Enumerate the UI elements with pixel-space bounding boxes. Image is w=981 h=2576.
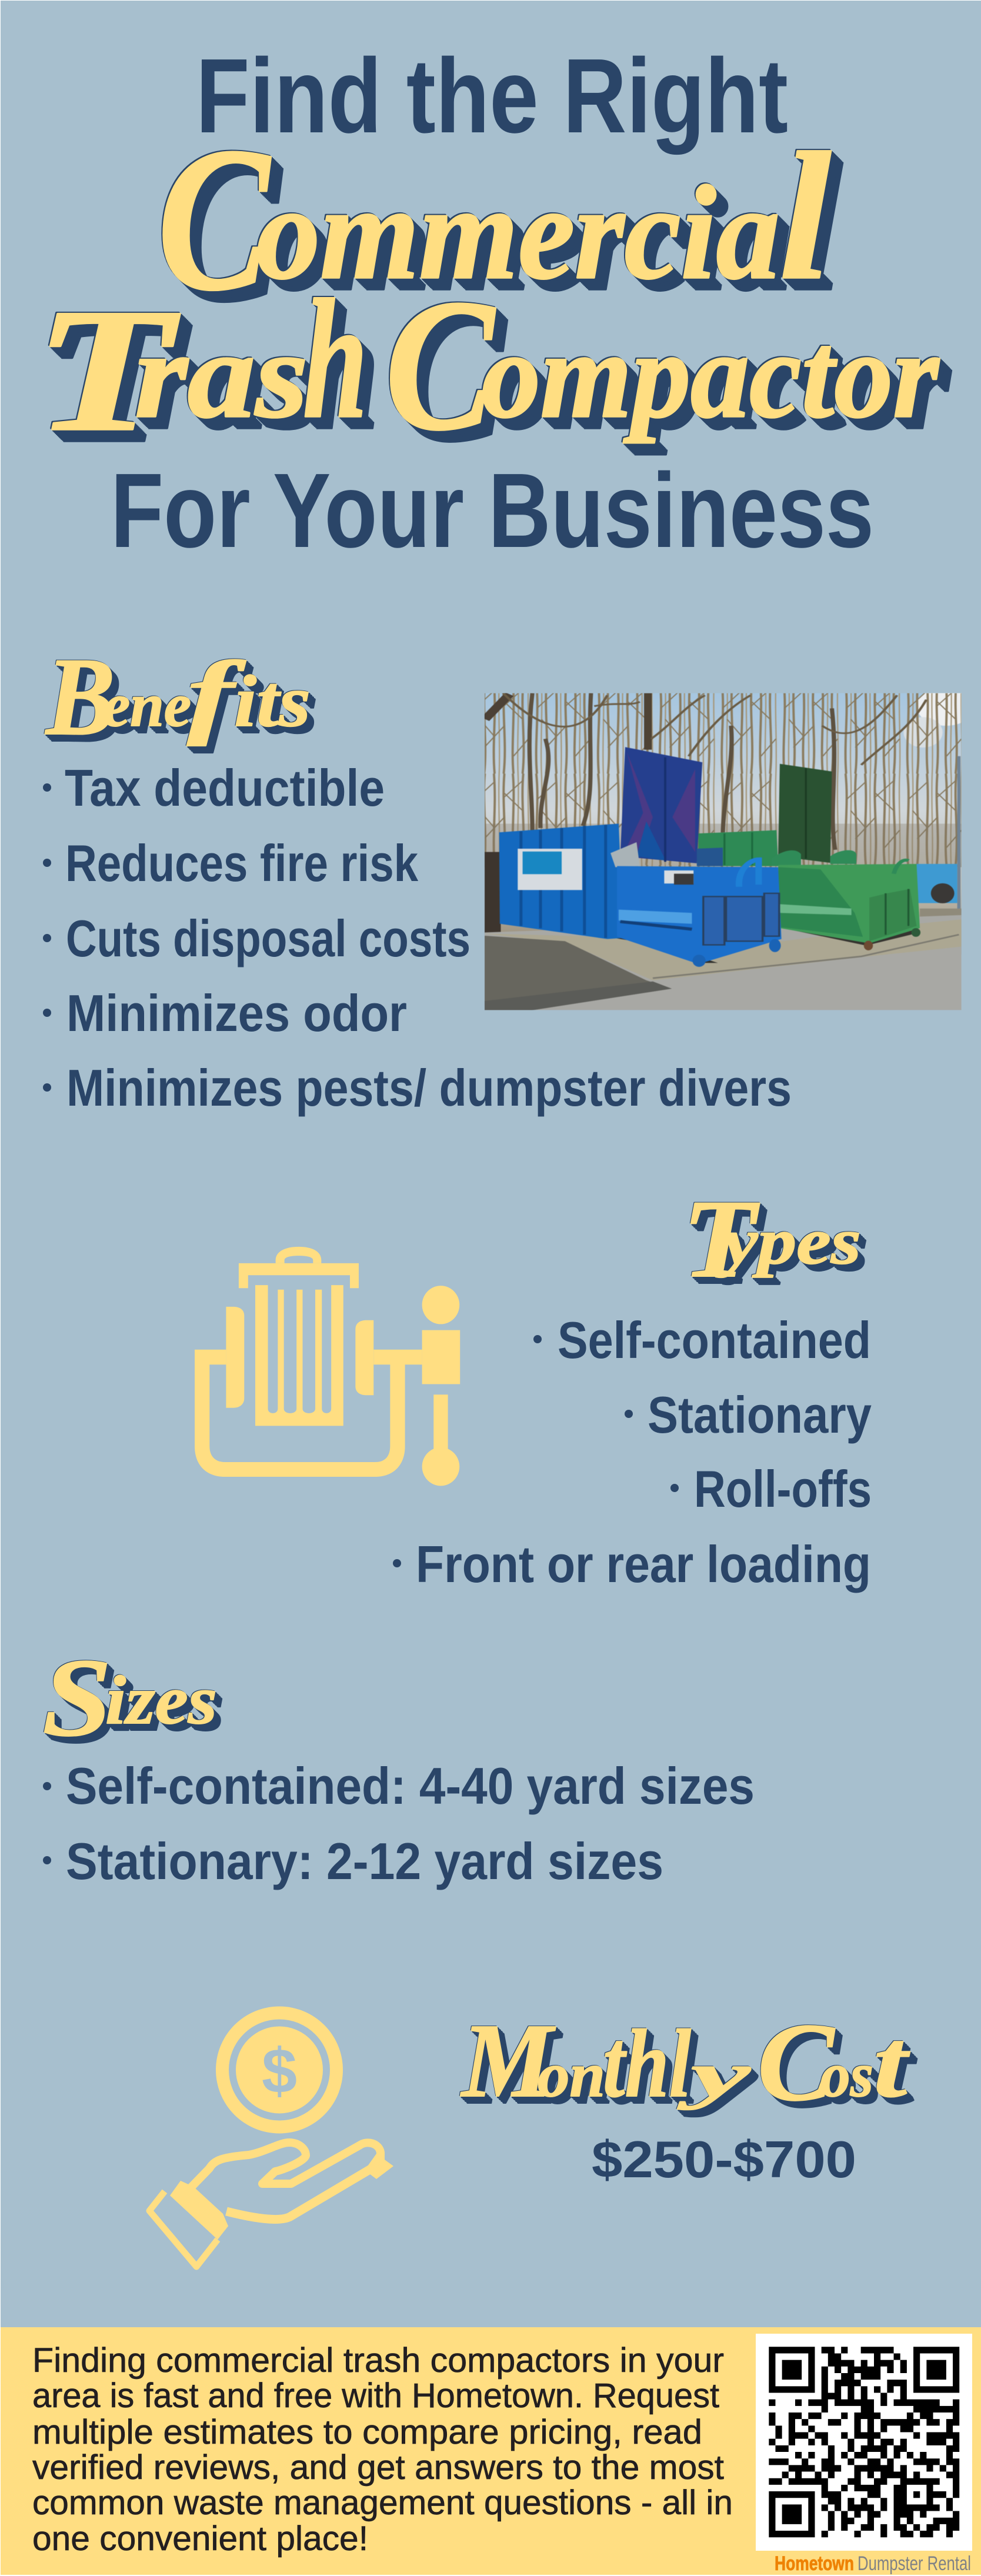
heading: Benefits: [45, 635, 311, 759]
heading: Sizes: [42, 1636, 217, 1760]
heading: Benefits: ene: [103, 670, 191, 739]
heading: Benefits: f: [187, 642, 246, 746]
footer text: [32, 2341, 733, 2558]
title script: Commercial: l: [779, 116, 832, 318]
heading: Types: ypes: [715, 1205, 861, 1278]
footer text: multiple estimates to compare pricing, read: [32, 2413, 702, 2451]
heading: Monthly Cost: [460, 2001, 910, 2124]
icon: dollar coin: $: [262, 2035, 297, 2106]
title: [34, 37, 940, 570]
footer text: Finding commercial trash compactors in your: [32, 2341, 724, 2380]
heading: Sizes: izes: [105, 1661, 217, 1739]
benefits list: Cuts disposal costs: [66, 909, 471, 967]
types list: Roll-offs: [694, 1460, 872, 1518]
heading: Monthly Cost: t: [873, 2010, 910, 2117]
sizes list: Stationary: 2-12 yard sizes: [66, 1832, 663, 1890]
title script: Trash Compactor: h: [303, 265, 368, 453]
heading: Monthly Cost: C: [758, 2001, 835, 2124]
heading: Monthly Cost: os: [820, 2040, 873, 2110]
panel: call to action footer: [1, 2327, 981, 2575]
types list: Stationary: [648, 1386, 872, 1444]
heading: Monthly Cost: thl: [603, 2010, 691, 2117]
panel: benefits: [43, 635, 975, 1117]
panel: monthly cost: [149, 2001, 910, 2267]
heading: Benefits: B: [45, 635, 115, 759]
heading: Monthly Cost: M: [460, 2002, 556, 2119]
heading: Monthly Cost: on: [538, 2040, 605, 2110]
sizes list: Self-contained: 4-40 yard sizes: [66, 1757, 755, 1815]
title script: Trash Compactor: [34, 261, 940, 469]
panel: sizes: [42, 1636, 755, 1890]
title line: Find the Right: Find the Right: [196, 37, 788, 155]
heading: Types: [682, 1177, 861, 1301]
title script: Commercial: C: [158, 105, 273, 333]
benefits list: Minimizes odor: [66, 984, 407, 1042]
footer text: common waste management questions - all in: [32, 2484, 733, 2522]
types list: Front or rear loading: [416, 1535, 871, 1593]
benefits list: Minimizes pests/ dumpster divers: [66, 1059, 792, 1117]
panel: types: [195, 1177, 872, 1593]
heading: Monthly Cost: y: [678, 2040, 751, 2110]
cost range: $250-$700: [592, 2130, 856, 2188]
icon: open hand: [149, 2143, 383, 2267]
types list: Self-contained: [558, 1311, 871, 1369]
icon: dollar coin: [216, 2007, 343, 2134]
benefits list: Reduces fire risk: [65, 834, 419, 892]
icon: trash compactor: [195, 1247, 460, 1486]
benefits list: Tax deductible: [65, 759, 385, 817]
heading: Benefits: its: [234, 661, 311, 742]
sizes list: [43, 1757, 755, 1890]
title script: Trash Compactor: ras: [135, 307, 308, 443]
footer text: one convenient place!: [32, 2520, 368, 2558]
title script: Trash Compactor: ompactor: [482, 307, 940, 443]
title script: Commercial: [158, 105, 832, 333]
heading: Sizes: S: [42, 1636, 112, 1760]
title script: Commercial: ommercia: [256, 159, 780, 307]
photo: blue and green compactors: [485, 686, 975, 1010]
benefits list: [43, 759, 792, 1117]
footer text: verified reviews, and get answers to the most: [32, 2448, 724, 2487]
heading: Types: T: [682, 1177, 760, 1301]
logo: Hometown Dumpster Rental: Hometown: [775, 2552, 854, 2575]
QR code: [756, 2334, 972, 2551]
title script: Trash Compactor: C: [385, 261, 498, 469]
footer text: area is fast and free with Hometown. Request: [32, 2377, 719, 2415]
types list: [393, 1311, 872, 1593]
title script: Trash Compactor: T: [34, 272, 182, 468]
icon: coin over hand: [149, 2007, 393, 2267]
